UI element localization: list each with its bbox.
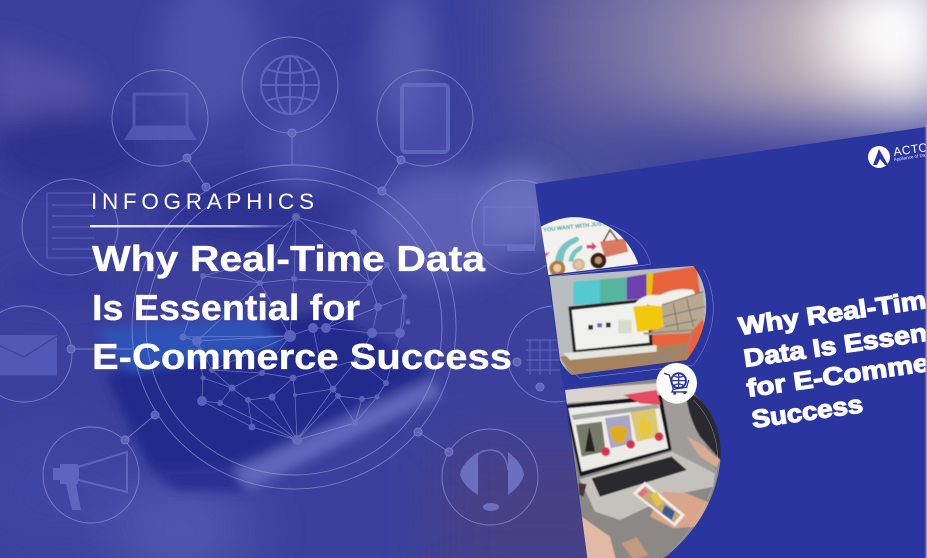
- large orbit rings: [132, 165, 456, 489]
- logo: Actowiz mark: [868, 143, 926, 168]
- diagram: network globe and surrounding channel icons: [0, 37, 603, 525]
- cover title: Why Real-Time: [737, 284, 927, 341]
- icon: cart with globe badge: [656, 363, 697, 404]
- photo: laptop and shopping cart with colourful bags: [550, 266, 706, 375]
- main title: E-Commerce Success: [92, 336, 512, 377]
- icon: document: [22, 179, 118, 275]
- icon: tablet: [377, 70, 473, 195]
- icon: envelope: [0, 306, 132, 402]
- icon: megaphone: [43, 411, 159, 523]
- tilted cover preview sheet: [535, 120, 927, 558]
- icon: monitor: [472, 180, 566, 274]
- cover title: Success: [750, 390, 865, 434]
- network globe mesh: [180, 213, 410, 445]
- photo: laptop storefront and hand holding phone: [565, 379, 721, 558]
- cover title: [736, 293, 926, 428]
- icon: laptop: [112, 70, 210, 191]
- thin outline arcs around the photos: [548, 225, 718, 558]
- main title: [92, 238, 512, 377]
- heading divider rule: [90, 225, 295, 227]
- main title: Why Real-Time Data: [92, 238, 486, 279]
- icon: globe: [242, 37, 338, 165]
- photo: shopping basket illustration with three women: YOU WANT WITH JUST A: [543, 221, 611, 234]
- icon: headset: [414, 428, 538, 525]
- cover photos: [537, 213, 730, 558]
- photo: shopping basket illustration with three women: [541, 217, 638, 275]
- icon: shopping cart: [507, 306, 603, 402]
- heading label: INFOGRAPHICS: INFOGRAPHICS: [91, 189, 314, 214]
- main title: Is Essential for: [92, 287, 360, 328]
